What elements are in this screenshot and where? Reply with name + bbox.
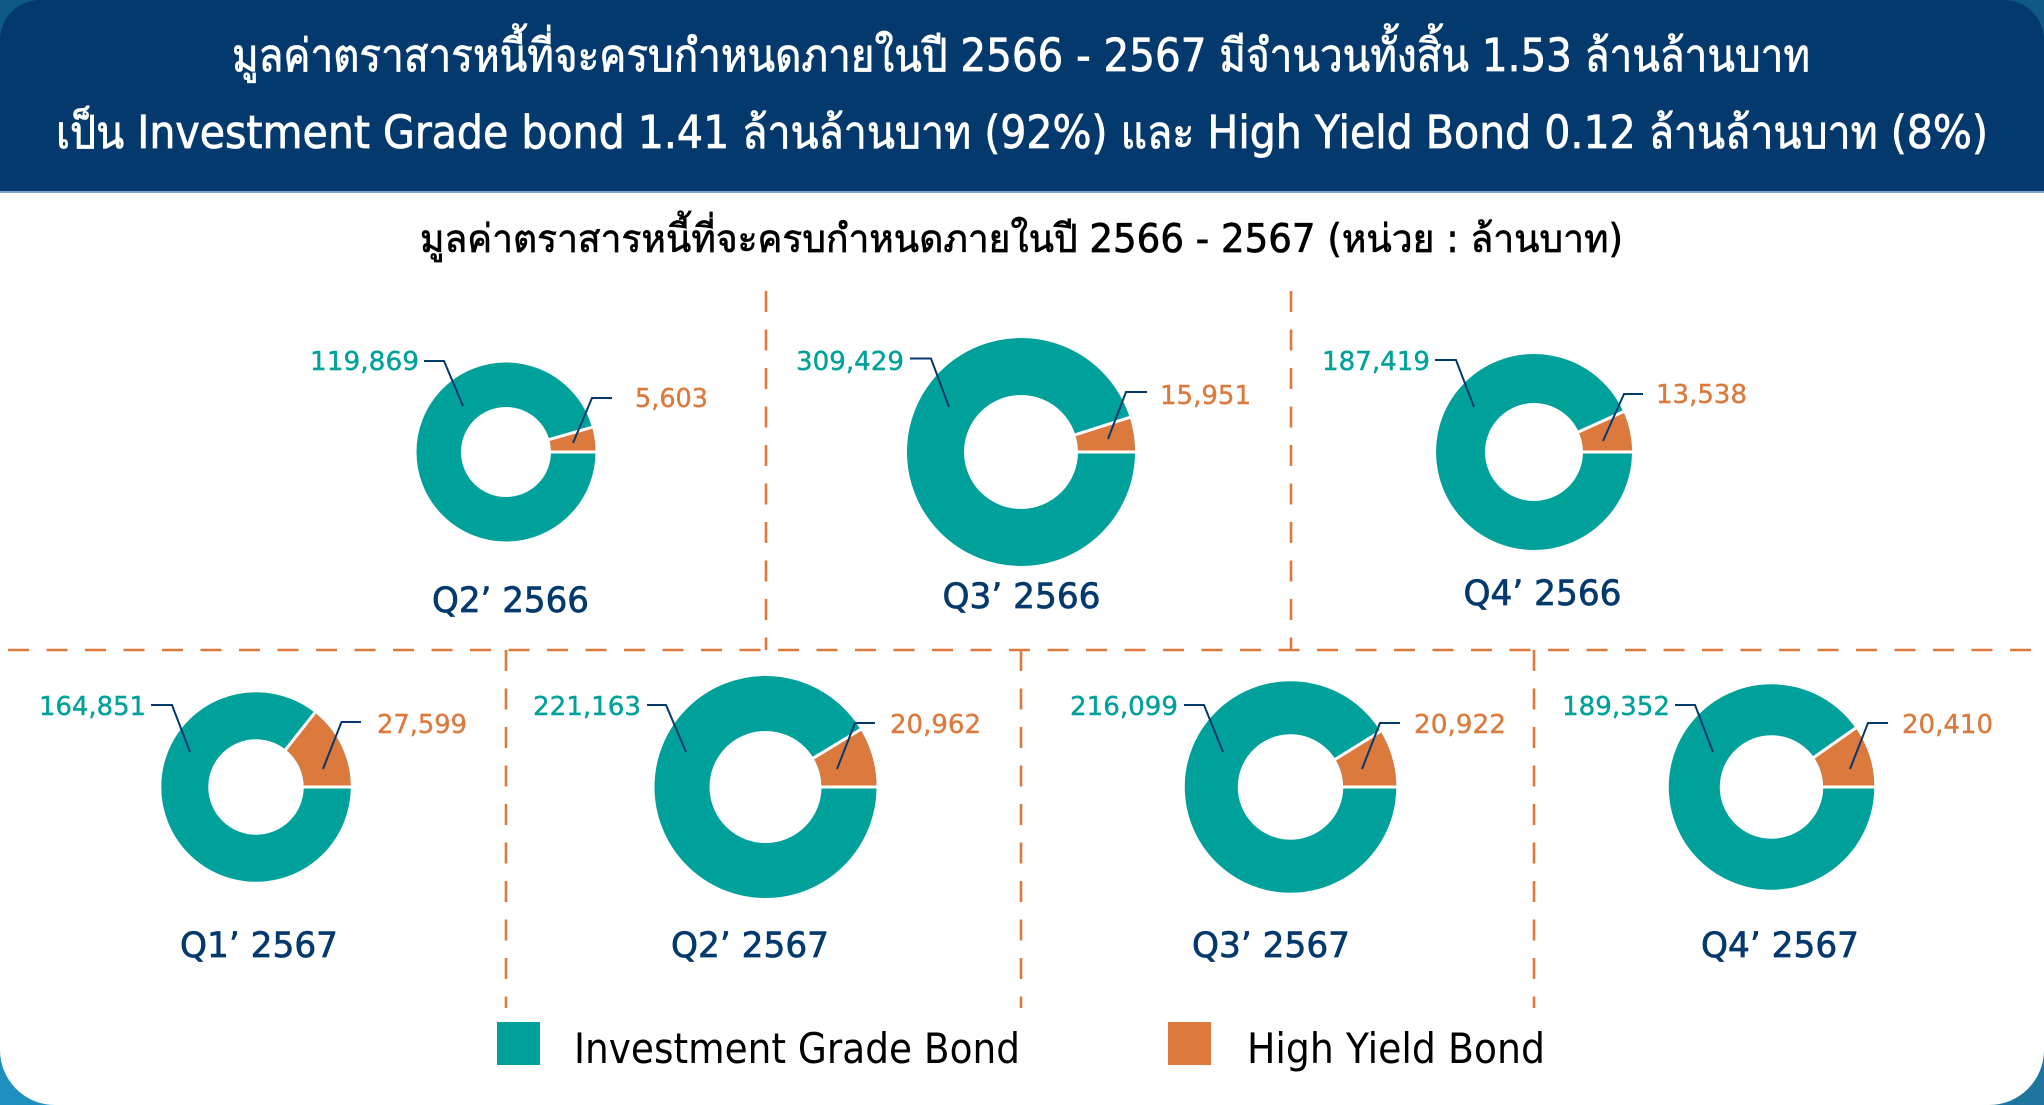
legend [497,1022,1545,1073]
dashed grid separators [8,291,2040,1008]
header background [0,0,2044,191]
header rule [0,191,2044,193]
panel: Q2 2567 [533,672,981,966]
panel: Q4 2567 [1562,679,1993,966]
value: high yield: 27,599 [377,710,467,740]
leader line: high yield [1850,723,1888,769]
value: high yield: 20,410 [1902,710,1993,740]
leader line: investment grade [1435,360,1474,407]
leader line: investment grade [1675,705,1713,752]
legend swatch: investment grade [497,1022,540,1065]
value: high yield: 20,922 [1414,710,1506,740]
leader line: high yield [837,723,875,769]
legend label: high yield: High Yield Bond [1247,1024,1545,1073]
leader line: investment grade [647,705,686,752]
donut chart: Q3 2566 [914,345,1137,559]
panel: Q4 2566 [1322,347,1747,614]
value: high yield: 20,962 [890,710,981,740]
quarter label: Q4’ 2566 [1464,574,1622,614]
header band [0,0,2044,193]
donut chart: Q2 2567 [651,672,880,902]
value: investment grade: 119,869 [310,347,419,377]
donut chart: Q3 2567 [1181,678,1400,896]
leader line: high yield [1603,394,1643,441]
leader line: high yield [1108,392,1147,439]
value: high yield: 13,538 [1656,380,1747,410]
donut chart: Q4 2566 [1437,355,1634,549]
panel: Q1 2567 [39,687,467,966]
header corner backdrop [0,0,2044,60]
quarter label: Q4’ 2567 [1701,926,1859,966]
panel: Q3 2566 [796,345,1251,617]
value: investment grade: 221,163 [533,692,641,722]
value: investment grade: 189,352 [1562,692,1670,722]
leader line: investment grade [1184,705,1223,752]
value: investment grade: 187,419 [1322,347,1430,377]
donut chart: Q2 2566 [423,369,597,535]
donut chart: Q1 2567 [156,687,356,887]
quarter label: Q2’ 2567 [671,926,829,966]
value: investment grade: 309,429 [796,347,904,377]
leader line: investment grade [151,705,190,752]
leader line: investment grade [910,358,949,407]
legend swatch: high yield [1168,1022,1211,1065]
value: high yield: 5,603 [635,384,708,414]
chart subtitle: มูลค่าตราสารหนี้ที่จะครบกำหนดภายในปี 2566 - 2567 (หน่วย : ล้านบาท) [420,210,1623,262]
quarter label: Q1’ 2567 [180,926,338,966]
leader line: investment grade [424,361,463,406]
panel: Q3 2567 [1070,678,1506,966]
leader line: high yield [323,722,361,769]
legend label: investment grade: Investment Grade Bond [574,1024,1020,1073]
value: investment grade: 216,099 [1070,692,1178,722]
quarter label: Q2’ 2566 [432,581,589,621]
value: investment grade: 164,851 [39,692,146,722]
quarter label: Q3’ 2567 [1192,926,1350,966]
panel: Q2 2566 [310,347,708,621]
header line 1: มูลค่าตราสารหนี้ที่จะครบกำหนดภายในปี 2566 - 2567 มีจำนวนทั้งสิ้น 1.53 ล้านล้านบาท [232,23,1810,83]
leader line: high yield [573,398,612,443]
donut chart: Q4 2567 [1664,679,1879,895]
quarter label: Q3’ 2566 [942,577,1100,617]
value: high yield: 15,951 [1160,381,1251,411]
leader line: high yield [1362,723,1400,769]
